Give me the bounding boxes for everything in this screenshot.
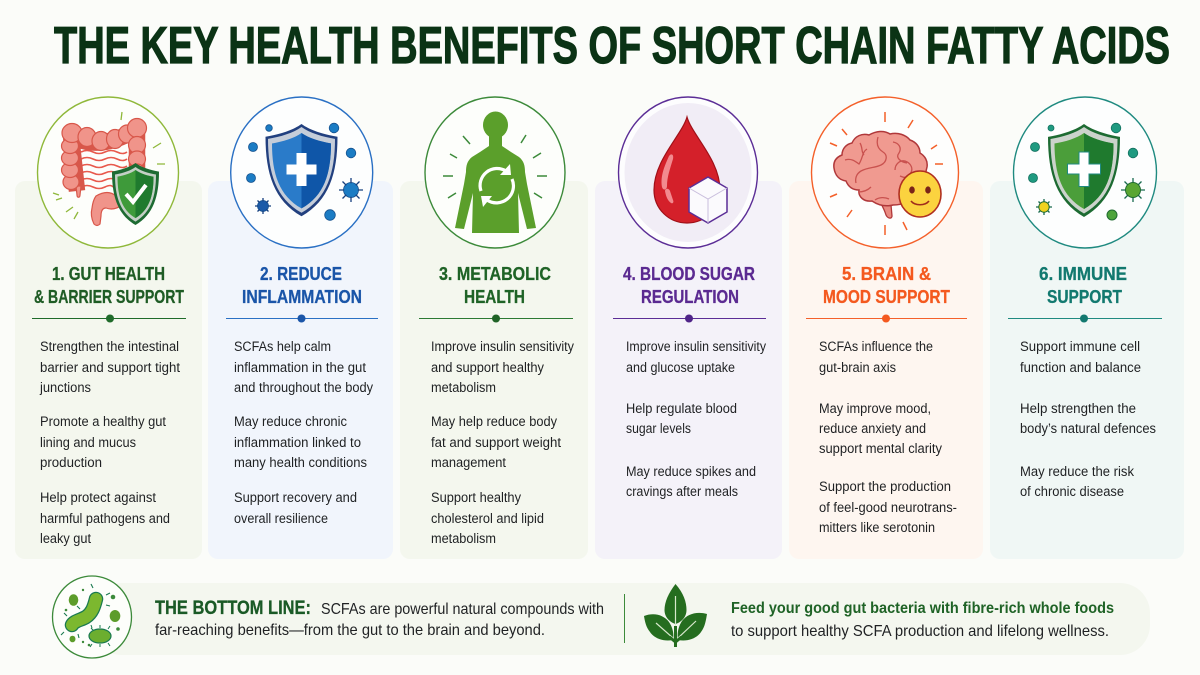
text block: Support the production: [819, 479, 951, 495]
panel: immune support: [990, 97, 1184, 559]
text block: leaky gut: [40, 531, 91, 547]
heading: [823, 263, 951, 307]
text block: mitters like serotonin: [819, 520, 935, 536]
text block: cravings after meals: [626, 484, 738, 500]
panel: metabolic health: [400, 97, 588, 559]
icon: intestine with shield: [53, 112, 165, 226]
text block: feed your gut: Feed your good gut bacteria with fibre-rich whole foods: [731, 600, 1114, 617]
text block: [431, 339, 575, 547]
text block: metabolism: [431, 531, 496, 547]
text block: Support recovery and: [234, 490, 357, 506]
text block: Strengthen the intestinal: [40, 339, 179, 355]
text block: junctions: [39, 380, 91, 396]
text block: Help regulate blood: [626, 401, 737, 417]
text block: the bottom line: SCFAs are powerful natural compounds with: [321, 601, 604, 618]
text block: and support healthy: [431, 360, 545, 376]
heading: HEALTH: [464, 286, 525, 307]
panel: bottom line strip: [52, 576, 1150, 658]
text block: inflammation linked to: [234, 435, 361, 451]
text block: May reduce spikes and: [626, 464, 756, 480]
text block: Improve insulin sensitivity: [626, 339, 767, 355]
text block: and glucose uptake: [626, 360, 735, 376]
text block: [819, 339, 957, 536]
panel: brain and mood: [789, 97, 983, 559]
text block: barrier and support tight: [40, 360, 180, 376]
text block: and throughout the body: [234, 380, 374, 396]
text block: many health conditions: [234, 455, 367, 471]
text block: cholesterol and lipid: [431, 511, 544, 527]
text block: feed your gut: [731, 600, 1114, 640]
icon: blue shield with germs: [246, 123, 363, 220]
text block: SCFAs influence the: [819, 339, 933, 355]
heading: 2. REDUCE: [260, 263, 342, 284]
text block: function and balance: [1020, 360, 1141, 376]
text block: Help strengthen the: [1020, 401, 1136, 417]
text block: reduce anxiety and: [819, 421, 926, 437]
text block: gut-brain axis: [819, 360, 896, 376]
icon: brain and smiley: [830, 112, 943, 235]
text block: feed your gut: to support healthy SCFA production and lifelong wellness.: [731, 623, 1109, 640]
text block: [234, 339, 374, 527]
panel: gut health: [15, 97, 202, 559]
text block: production: [40, 455, 102, 471]
text block: the bottom line: far-reaching benefits—from the gut to the brain and beyond.: [155, 622, 545, 639]
panel: reduce inflammation: [208, 97, 393, 559]
heading: [242, 263, 362, 307]
text block: [39, 339, 180, 547]
text block: inflammation in the gut: [234, 360, 366, 376]
icon: gut bacteria: [52, 576, 132, 658]
text block: of feel-good neurotrans-: [819, 500, 957, 516]
heading: [623, 263, 755, 307]
text block: support mental clarity: [819, 441, 943, 457]
text block: the bottom line: [155, 598, 604, 639]
text block: Support healthy: [431, 490, 522, 506]
text block: May help reduce body: [431, 414, 558, 430]
heading: & BARRIER SUPPORT: [34, 286, 185, 307]
text block: harmful pathogens and: [40, 511, 170, 527]
heading: REGULATION: [641, 286, 739, 307]
text block: May reduce the risk: [1020, 464, 1135, 480]
icon: leaves: [644, 584, 707, 647]
heading: MOOD SUPPORT: [823, 286, 951, 307]
text block: overall resilience: [234, 511, 328, 527]
text block: Support immune cell: [1020, 339, 1140, 355]
icon: green shield with germs: [1028, 123, 1145, 220]
text block: fat and support weight: [431, 435, 561, 451]
text block: sugar levels: [626, 421, 691, 437]
text block: metabolism: [431, 380, 496, 396]
text block: Promote a healthy gut: [40, 414, 166, 430]
heading: [439, 263, 551, 307]
heading: 1. GUT HEALTH: [52, 263, 165, 284]
heading: 6. IMMUNE: [1039, 263, 1127, 284]
text block: body’s natural defences: [1020, 421, 1156, 437]
text block: SCFAs help calm: [234, 339, 331, 355]
heading: INFLAMMATION: [242, 286, 362, 307]
heading: SUPPORT: [1047, 286, 1123, 307]
text block: [1020, 339, 1156, 500]
icon: blood drop and sugar cube: [654, 117, 727, 223]
text block: lining and mucus: [40, 435, 136, 451]
text block: May improve mood,: [819, 401, 931, 417]
heading: [1039, 263, 1127, 307]
heading: 3. METABOLIC: [439, 263, 551, 284]
heading: 5. BRAIN &: [842, 263, 931, 284]
heading: 4. BLOOD SUGAR: [623, 263, 755, 284]
text block: of chronic disease: [1020, 484, 1124, 500]
text block: [626, 339, 767, 500]
text block: May reduce chronic: [234, 414, 347, 430]
icon: body with metabolism arrows: [443, 112, 547, 233]
text block: management: [431, 455, 506, 471]
panel: blood sugar regulation: [595, 97, 782, 559]
text block: the bottom line: THE BOTTOM LINE:: [155, 598, 311, 619]
heading: [34, 263, 185, 307]
text block: Improve insulin sensitivity: [431, 339, 575, 355]
text block: Help protect against: [40, 490, 156, 506]
